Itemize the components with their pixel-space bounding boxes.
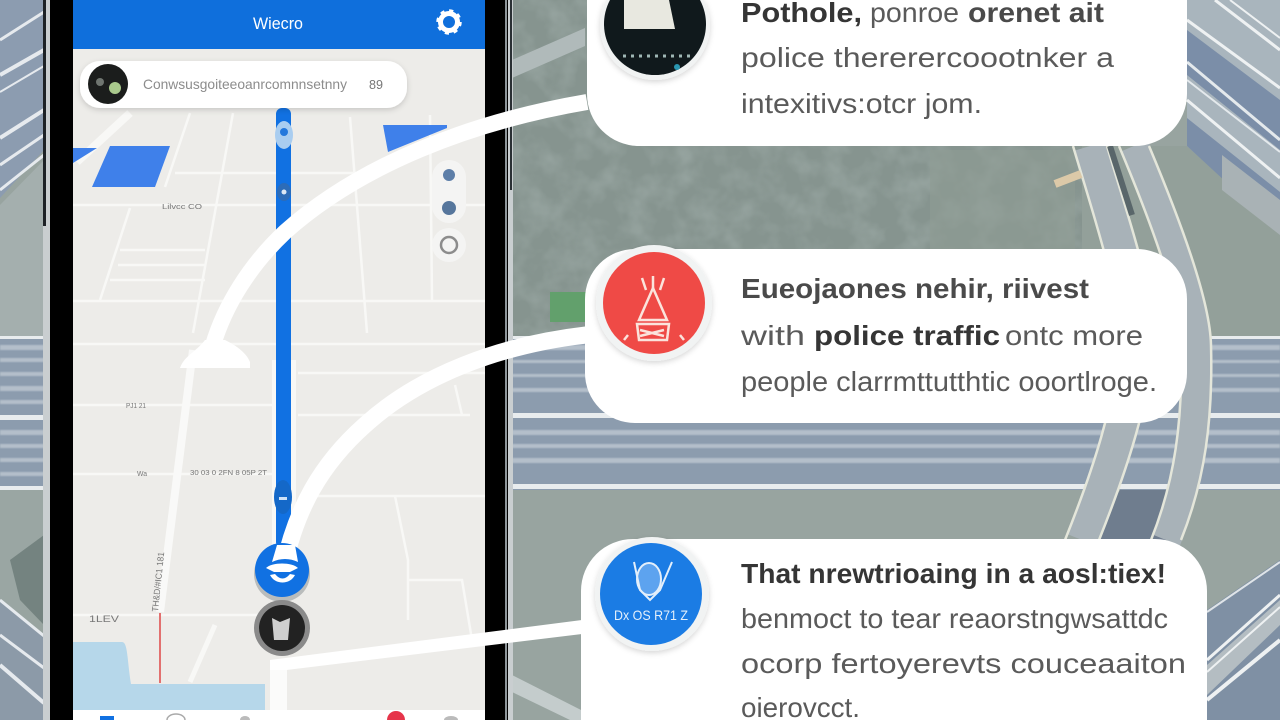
card text: with — [740, 320, 805, 351]
dark triangle between ramps — [1090, 490, 1190, 540]
panel: traffic card — [585, 245, 1187, 423]
dark location pin — [254, 600, 310, 656]
card text: benmoct to tear reaorstngwsattdc — [741, 603, 1168, 634]
card text: police traffic — [814, 320, 1000, 351]
red street — [159, 613, 161, 683]
connector 3 — [270, 620, 582, 672]
forest area — [512, 0, 1082, 336]
phone — [43, 0, 587, 720]
blue parcels — [73, 125, 447, 187]
water — [73, 642, 265, 710]
avatar — [88, 64, 128, 104]
search text: Conwsusgoiteeoanrcomnnsetnny — [143, 76, 347, 92]
connector 2 — [284, 335, 586, 566]
right grass — [1082, 146, 1280, 336]
highway band — [0, 336, 1280, 490]
card text: That nrewtrioaing in a aosl:tiex! — [741, 558, 1166, 589]
bottom road stub — [512, 675, 585, 720]
connector 3 stem — [270, 670, 287, 720]
map labels — [89, 204, 268, 624]
map streets — [73, 113, 485, 640]
search count: 89 — [369, 77, 383, 92]
panel: pothole card — [587, 0, 1187, 146]
blue location pin — [254, 543, 310, 602]
map labels: PJ1 21 — [126, 403, 146, 410]
card text: police thererercoootnker a — [741, 42, 1114, 73]
map labels: 1LEV — [89, 614, 119, 624]
bottom right diagonal roads — [1207, 560, 1280, 720]
icon: red warning badge — [596, 245, 712, 361]
icon: blue badge — [595, 537, 709, 651]
search pill — [80, 61, 407, 108]
main white road — [160, 350, 193, 612]
map labels: Lilvcc CO — [162, 204, 203, 211]
card text: ontc more — [1005, 320, 1143, 351]
map side buttons — [432, 160, 466, 262]
card text: ocorp fertoyerevts couceaaiton — [741, 648, 1186, 679]
card text — [740, 273, 1157, 397]
card text: intexitivs:otcr jom. — [741, 88, 982, 119]
icon: settings gear — [438, 11, 460, 33]
card text: people clarrmttutthtic ooortlroge. — [741, 366, 1157, 397]
connector 1 — [180, 102, 587, 368]
panel: rerouting card — [581, 537, 1207, 720]
map labels: Wa — [137, 471, 147, 478]
card text: Eueojaones nehir, riivest — [741, 273, 1089, 304]
app title: Wiecro — [253, 14, 303, 33]
card text — [741, 0, 1114, 119]
top bar — [73, 0, 485, 49]
map labels: 30 03 0 2FN 8 05P 2T — [190, 470, 268, 477]
icon: blue badge: Dx OS R71 Z — [614, 607, 688, 623]
top right diagonal roads — [1187, 0, 1280, 235]
left strip roads top — [0, 0, 44, 336]
route line — [272, 108, 296, 550]
right curved ramp — [1055, 146, 1211, 540]
phone frame — [43, 0, 513, 720]
left strip trees and roads bottom — [0, 490, 44, 720]
map — [73, 49, 485, 720]
bottom navigation — [73, 710, 485, 720]
card text — [741, 558, 1186, 720]
map labels: TH&D/#IC1 181 — [150, 551, 166, 612]
icon: pothole badge — [600, 0, 710, 80]
